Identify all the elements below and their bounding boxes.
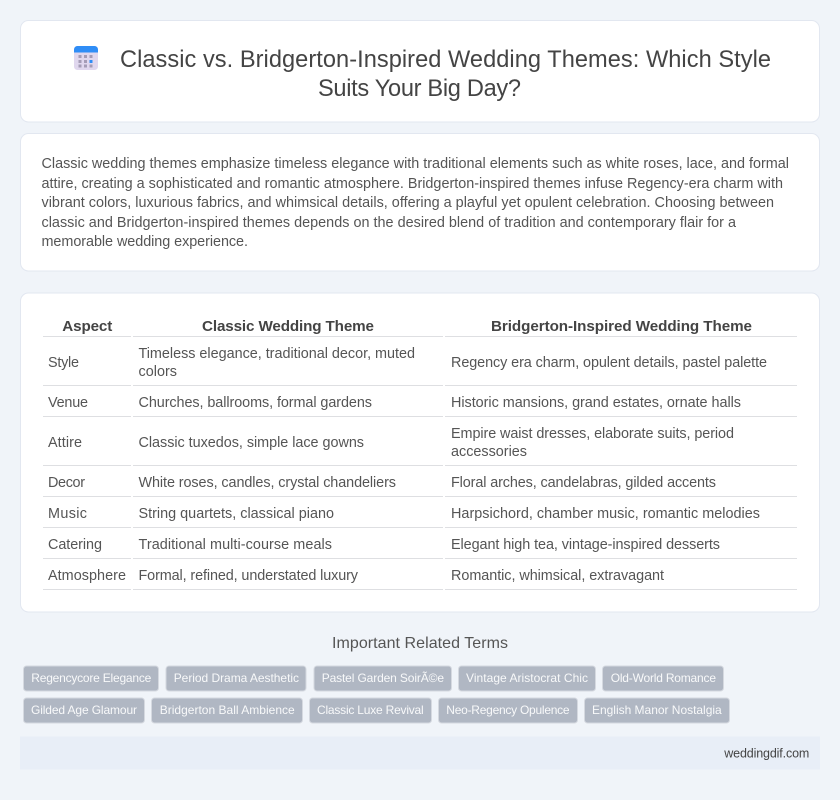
row: decor: [43, 475, 797, 497]
row: catering: Elegant high tea, vintage-inspired desserts: [451, 537, 720, 553]
row: venue: Venue: [48, 395, 88, 411]
row: venue: [43, 395, 797, 417]
footer bar: weddingdif.com: [723, 746, 809, 760]
tag: [24, 698, 144, 723]
row: music: Music: [48, 506, 87, 522]
row: venue: Churches, ballrooms, formal gardens: [138, 395, 372, 411]
tag: [438, 698, 578, 723]
panel: comparison table: [20, 293, 820, 612]
table header row: Bridgerton-Inspired Wedding Theme: [491, 318, 752, 335]
row: catering: [43, 537, 797, 559]
tag: [24, 666, 158, 691]
tag: English Manor Nostalgia: [592, 703, 722, 717]
title: Suits Your Big Day?: [318, 76, 521, 102]
tag: Classic Luxe Revival: [317, 703, 424, 717]
table header row: Aspect: [62, 318, 112, 335]
row: decor: Floral arches, candelabras, gilded accents: [451, 475, 716, 491]
row: decor: Decor: [48, 475, 85, 491]
tag: [602, 666, 724, 691]
row: music: String quartets, classical piano: [138, 506, 334, 522]
tag: [458, 666, 596, 691]
title: Classic vs. Bridgerton-Inspired Wedding Themes: Which Style: [120, 47, 771, 73]
tag: [314, 666, 452, 691]
row: style: [43, 346, 797, 386]
row: attire: [43, 426, 797, 466]
text block: introduction: classic and Bridgerton-inspired themes depends on the desired blend of tradition and contemporary flair for a: [42, 215, 736, 231]
heading: related terms: Important Related Terms: [332, 635, 508, 652]
row: attire: Classic tuxedos, simple lace gowns: [138, 435, 364, 451]
text block: introduction: [42, 156, 789, 250]
table header row: [43, 318, 797, 337]
tag: Regencycore Elegance: [31, 671, 152, 685]
row: style: Timeless elegance, traditional decor, muted: [138, 346, 415, 362]
tag: Pastel Garden SoirÃ©e: [322, 671, 444, 685]
tag: Old-World Romance: [611, 671, 716, 685]
row: atmosphere: Romantic, whimsical, extravagant: [451, 568, 664, 584]
tag: Period Drama Aesthetic: [174, 671, 299, 685]
panel: description: [20, 134, 820, 271]
tag: Neo-Regency Opulence: [446, 703, 570, 717]
row: atmosphere: Formal, refined, understated luxury: [138, 568, 359, 584]
row: atmosphere: Atmosphere: [48, 568, 126, 584]
tag: Bridgerton Ball Ambience: [160, 703, 295, 717]
tag: [584, 698, 730, 723]
row: attire: Empire waist dresses, elaborate suits, period: [451, 426, 734, 442]
title: [120, 47, 771, 102]
row: style: Regency era charm, opulent details, pastel palette: [451, 355, 767, 371]
row: decor: White roses, candles, crystal chandeliers: [138, 475, 396, 491]
icon: calendar: [74, 46, 98, 70]
table header row: Classic Wedding Theme: [202, 318, 374, 335]
tag: [166, 666, 306, 691]
row: atmosphere: [43, 568, 797, 590]
row: style: Style: [48, 355, 79, 371]
text block: introduction: memorable wedding experience.: [42, 234, 248, 250]
tag: Gilded Age Glamour: [31, 703, 137, 717]
tag list: related terms: [24, 666, 730, 723]
row: music: [43, 506, 797, 528]
footer bar: [20, 736, 820, 770]
tag: [310, 698, 432, 723]
tag: [152, 698, 302, 723]
text block: introduction: Classic wedding themes emphasize timeless elegance with traditional elements such as white roses, lace, and formal: [42, 156, 789, 172]
row: catering: Catering: [48, 537, 102, 553]
text block: introduction: attire, creating a sophisticated and romantic atmosphere. Bridgerton-inspired themes infuse Regency-era charm with: [42, 176, 783, 192]
row: style: colors: [138, 364, 177, 380]
row: music: Harpsichord, chamber music, romantic melodies: [451, 506, 760, 522]
panel: header: [20, 20, 820, 122]
row: catering: Traditional multi-course meals: [138, 537, 332, 553]
row: venue: Historic mansions, grand estates, ornate halls: [451, 395, 741, 411]
row: attire: accessories: [451, 444, 527, 460]
text block: introduction: vibrant colors, luxurious fabrics, and whimsical details, offering a playful yet opulent celebration. Choosing between: [42, 195, 774, 211]
row: attire: Attire: [48, 435, 82, 451]
tag: Vintage Aristocrat Chic: [466, 671, 588, 685]
